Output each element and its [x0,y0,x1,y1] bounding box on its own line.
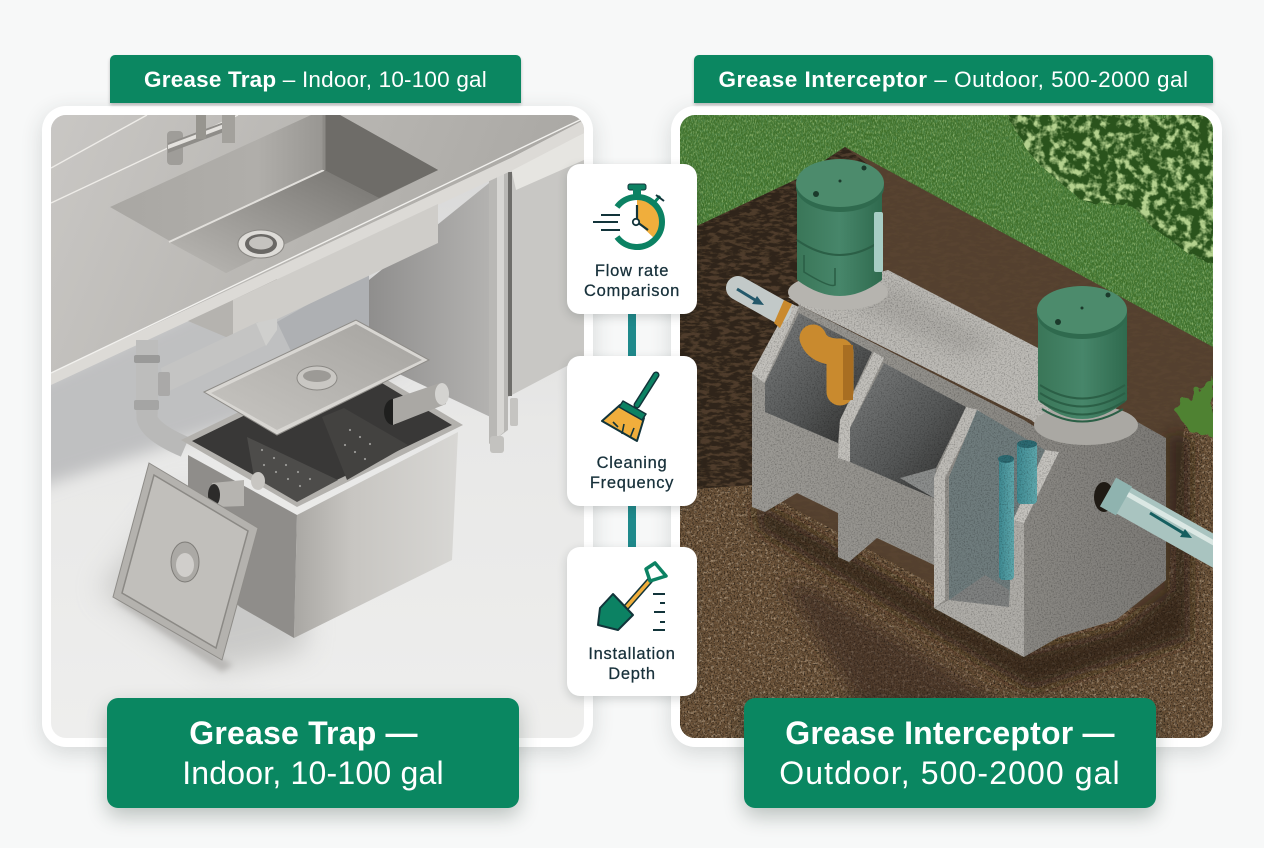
sink bowl front below counter [188,279,277,340]
caption: grease interceptor [744,698,1156,808]
panel frame: grease trap [42,106,593,747]
icon: stopwatch [593,184,665,250]
panel frame: grease interceptor [671,106,1222,747]
excavated soil walls [680,147,1213,738]
leaning lid [113,463,258,672]
bush [1006,115,1213,263]
label: flow rate comparison [584,262,680,300]
caption detail: Indoor, 10-100 gal [182,755,444,791]
concrete tank body [752,270,1166,657]
caption title: Grease Trap — [189,715,418,751]
faucet [167,115,235,165]
label: installation depth: Installation [588,645,676,663]
cabinet side panel [369,183,489,416]
illustrations [51,115,1213,738]
connector: cleaning to depth [628,506,636,547]
green riser left [796,159,884,296]
illustration: outdoor grease interceptor in excavated soil [680,115,1228,738]
heading: grease trap: Grease Trap – Indoor, 10-100 gal [144,67,487,92]
card: installation depth [567,547,697,696]
soil floor [680,400,1213,738]
concrete texture [752,270,1166,657]
green riser right [1037,286,1127,422]
label: cleaning frequency: Cleaning [597,454,667,472]
label: installation depth: Depth [608,665,656,683]
icon: broom [601,372,660,442]
icon: shovel [597,561,668,631]
teal vent pipes [998,440,1037,580]
label: flow rate comparison: Comparison [584,282,680,300]
chamber 3 [949,410,1045,607]
raised tray lid [204,320,429,435]
lawn [680,115,1213,738]
caption detail: Outdoor, 500-2000 gal [779,755,1121,791]
heading: grease interceptor: Grease Interceptor – Outdoor, 500-2000 gal [718,67,1189,92]
countertop [51,115,584,373]
orange elbow [813,338,848,400]
label: cleaning frequency [590,454,674,492]
trap box [181,358,463,638]
connector: flow rate to cleaning [628,314,636,356]
heading: grease interceptor [694,55,1213,103]
collars [788,281,888,310]
divider 2 [838,352,884,462]
door [508,160,584,397]
label: flow rate comparison: Flow rate [595,262,669,280]
chamber 2 [850,363,966,498]
divider 3 [934,407,979,608]
left pipe [737,288,792,328]
floor shadow [100,540,314,678]
chamber 1 [765,313,872,443]
lower grass patch [1174,377,1213,437]
trench shadows [782,578,998,698]
drain [238,230,284,258]
card: flow rate comparison [567,164,697,314]
rear outlet [384,399,397,425]
slab top [788,270,1062,443]
card: cleaning frequency [567,356,697,506]
caption title: Grease Interceptor — [785,715,1115,751]
sink opening [110,115,438,244]
table leg [489,170,508,444]
right outlet pipe [1094,482,1228,559]
side inlet [212,480,244,507]
label: cleaning frequency: Frequency [590,474,674,492]
label: installation depth [588,645,676,683]
heading: grease trap [110,55,521,103]
caption: grease trap [107,698,519,808]
grey waste pipes [134,318,277,447]
illustration: indoor grease trap under stainless sink [30,115,584,738]
